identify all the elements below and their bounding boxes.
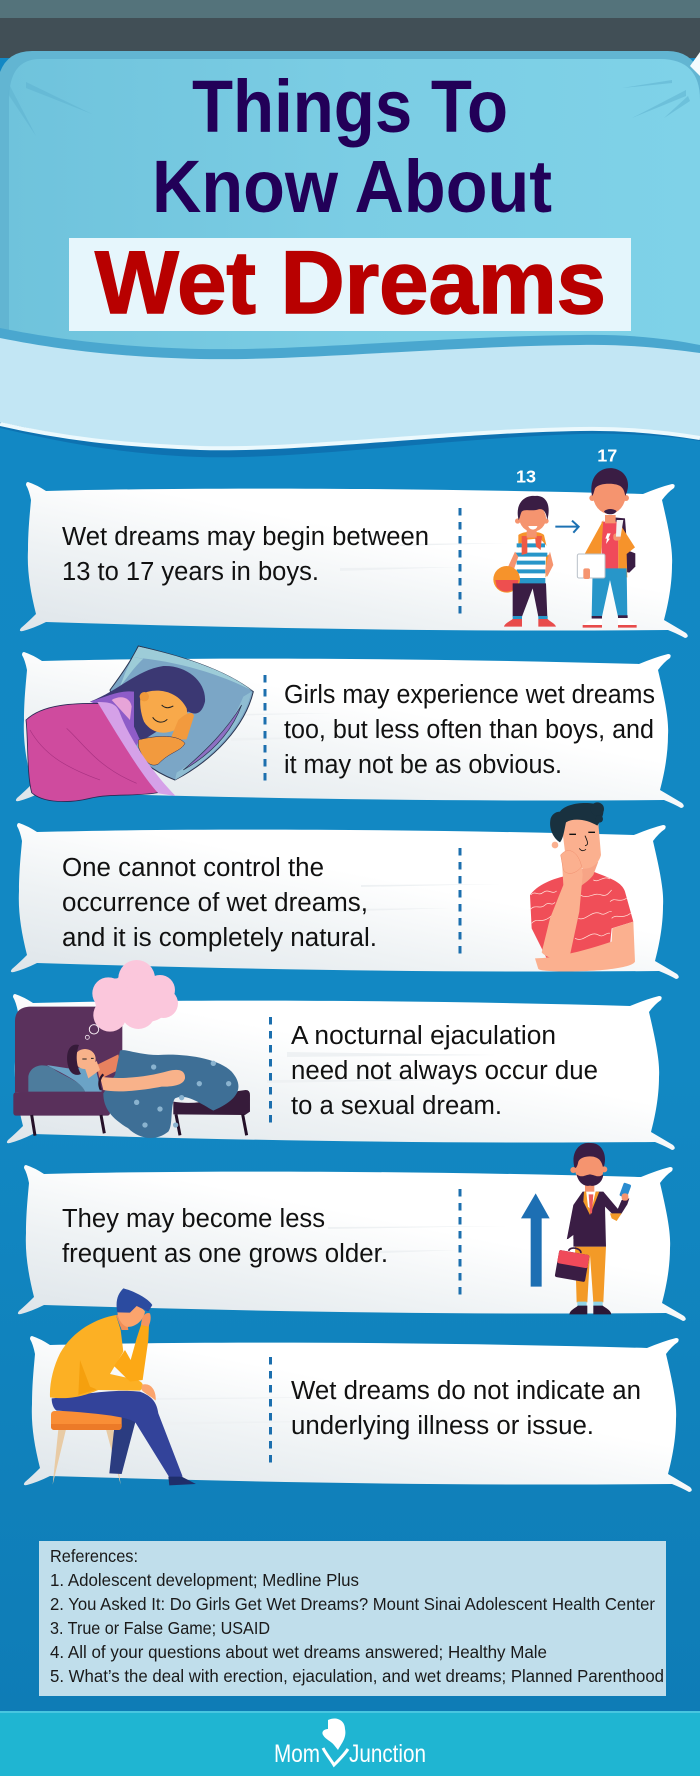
panel: pillow 1: [20, 482, 688, 638]
icon: boy aged 13 and teen aged 17: [493, 446, 637, 628]
footer: [0, 1711, 700, 1776]
icon: person sleeping and dreaming on bed: [13, 960, 250, 1138]
logo: MomJunction: Junction: [349, 1740, 426, 1768]
text: pillow 3: One cannot control the: [62, 854, 324, 882]
man: [555, 1143, 631, 1314]
panel: pillow 3: [11, 823, 679, 979]
divider 6: [269, 1357, 272, 1466]
title: Things To: [192, 65, 508, 148]
title: [69, 65, 631, 332]
icon: boy aged 13 and teen aged 17: 17: [597, 446, 617, 466]
references: 3. True or False Game; USAID: [50, 1618, 270, 1638]
panel: pillow 2: [16, 652, 684, 808]
panel: pillow 5: [18, 1165, 686, 1321]
divider 5: [458, 1189, 462, 1297]
text: pillow 5: [62, 1205, 388, 1268]
text: pillow 6: Wet dreams do not indicate an: [291, 1377, 641, 1405]
icon: sad man sitting on stool: [50, 1288, 196, 1485]
text: pillow 1: Wet dreams may begin between: [62, 523, 429, 551]
references: References:: [50, 1546, 138, 1566]
references: 1. Adolescent development; Medline Plus: [50, 1570, 359, 1590]
arrow up: [521, 1193, 550, 1287]
logo: MomJunction: [274, 1718, 426, 1768]
text: pillow 1: [62, 523, 429, 586]
text: pillow 4: A nocturnal ejaculation: [291, 1022, 556, 1050]
text: pillow 2: Girls may experience wet dreams: [284, 681, 655, 709]
icon: up arrow and grown man with phone: [521, 1143, 631, 1314]
text: pillow 3: and it is completely natural.: [62, 924, 377, 952]
text: pillow 3: [62, 854, 377, 952]
text: pillow 4: [291, 1022, 598, 1120]
logo: MomJunction: Mom: [274, 1740, 320, 1768]
icon: thinking man in red shirt: [530, 802, 635, 972]
references: 4. All of your questions about wet dreams answered; Healthy Male: [50, 1642, 547, 1662]
icon: boy aged 13 and teen aged 17: 13: [516, 466, 536, 486]
teen: [577, 468, 637, 628]
title: Know About: [152, 145, 552, 228]
panel: header headboard: [0, 51, 700, 457]
text: pillow 6: [291, 1377, 641, 1440]
icon: girl sleeping under blanket: [26, 646, 253, 802]
text: pillow 5: frequent as one grows older.: [62, 1240, 388, 1268]
text: pillow 3: occurrence of wet dreams,: [62, 889, 368, 917]
divider 1: [458, 508, 462, 616]
divider 4: [269, 1017, 272, 1126]
text: pillow 6: underlying illness or issue.: [291, 1412, 594, 1440]
text: pillow 2: it may not be as obvious.: [284, 751, 562, 779]
references: [39, 1541, 666, 1696]
text: pillow 2: [284, 681, 655, 779]
references: 5. What’s the deal with erection, ejaculation, and wet dreams; Planned Parenthood: [50, 1666, 664, 1686]
text: pillow 2: too, but less often than boys, and: [284, 716, 654, 744]
briefcase: [555, 1246, 590, 1282]
references: 2. You Asked It: Do Girls Get Wet Dreams? Mount Sinai Adolescent Health Center: [50, 1594, 655, 1614]
text: pillow 4: to a sexual dream.: [291, 1092, 502, 1120]
text: pillow 5: They may become less: [62, 1205, 325, 1233]
divider 3: [458, 848, 462, 956]
text: pillow 1: 13 to 17 years in boys.: [62, 558, 319, 586]
text: pillow 4: need not always occur due: [291, 1057, 598, 1085]
boy: [493, 496, 556, 627]
arrow: [555, 521, 579, 533]
title highlight box: Wet Dreams: [95, 232, 606, 332]
panel: pillow 4: [7, 994, 675, 1150]
divider 2: [264, 675, 266, 783]
panel: pillow 6: [24, 1336, 692, 1492]
